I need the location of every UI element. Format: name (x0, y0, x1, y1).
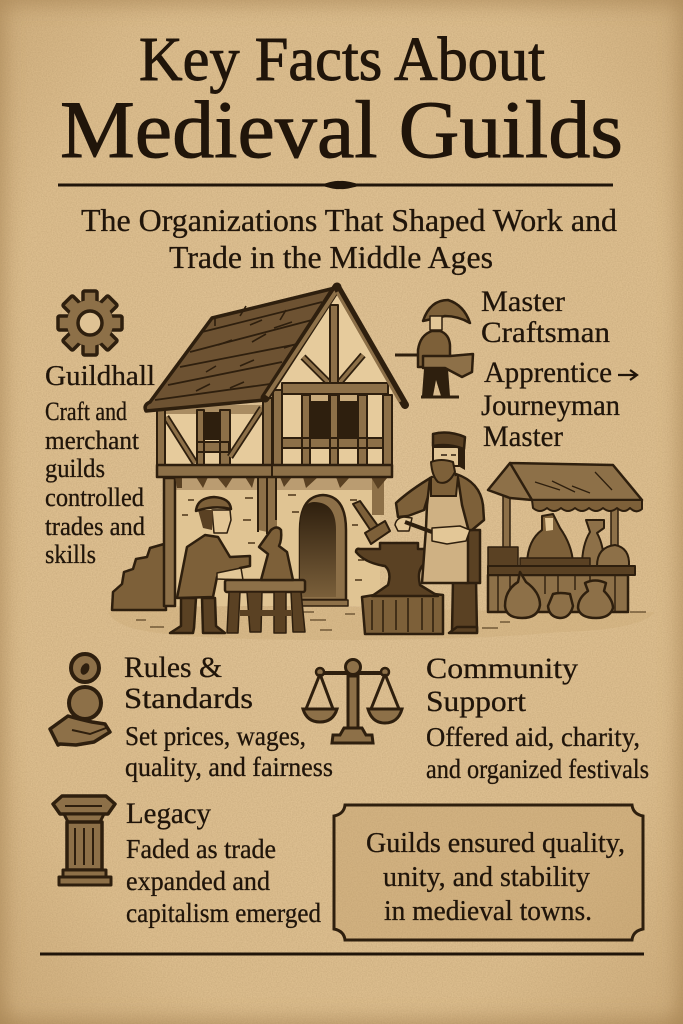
lower wall (170, 476, 380, 606)
callout (334, 805, 643, 940)
anvil (356, 543, 445, 596)
panel: master craftsman text (481, 285, 637, 453)
icon: stone column (53, 796, 115, 885)
subtitle: Trade in the Middle Ages (169, 239, 493, 275)
upper right bay (272, 390, 392, 466)
panel: guildhall text: Craft and (45, 397, 127, 426)
text: legacy: Faded as trade (126, 834, 276, 864)
text: community support: and organized festivals (426, 754, 649, 784)
panel: guildhall text: controlled (45, 483, 144, 512)
text: rules and standards (124, 651, 333, 782)
icon: master craftsman figure (395, 300, 473, 397)
panel: master craftsman text: Apprentice (484, 356, 612, 389)
text: community support (426, 652, 649, 784)
title: Medieval Guilds (60, 84, 623, 175)
text: legacy (126, 797, 321, 928)
panel: master craftsman text: Master (481, 285, 565, 318)
callout: unity, and stability (383, 861, 590, 893)
gable (265, 287, 407, 406)
text: legacy: Legacy (126, 797, 211, 830)
guildhall (145, 287, 407, 606)
panel: master craftsman text: Craftsman (481, 316, 610, 349)
hammer (353, 501, 378, 531)
text: community support: Support (426, 685, 527, 718)
counter (488, 575, 628, 612)
icon: gear (58, 291, 122, 355)
roof (145, 288, 335, 411)
text: rules and standards: Set prices, wages, (125, 721, 306, 751)
corbels (175, 477, 388, 489)
panel: guildhall text (45, 361, 155, 569)
panel: guildhall text: trades and (45, 512, 145, 541)
blacksmith (353, 433, 484, 633)
callout: Guilds ensured quality, (366, 827, 625, 859)
bench (225, 580, 305, 633)
illustration: medieval town scene (108, 287, 655, 640)
panel: guildhall text: guilds (45, 454, 105, 483)
ground (108, 606, 655, 640)
text: rules and standards: quality, and fairness (125, 752, 333, 782)
beam (157, 465, 392, 477)
panel: master craftsman text: Master (483, 420, 563, 453)
apprentice (170, 497, 250, 633)
goods (582, 520, 604, 566)
merchant (527, 514, 573, 563)
subtitle: The Organizations That Shaped Work and (81, 202, 617, 238)
market stall (488, 463, 642, 618)
icon: coin in hand (50, 654, 110, 745)
text: community support: Offered aid, charity, (426, 722, 640, 752)
panel: guildhall text: skills (45, 540, 96, 569)
panel: guildhall text: merchant (45, 426, 140, 455)
icon: balance scales (303, 660, 402, 743)
text: rules and standards: Standards (124, 682, 253, 715)
callout: in medieval towns. (384, 895, 592, 927)
stump (362, 593, 443, 634)
bush (112, 544, 166, 610)
text: legacy: capitalism emerged (126, 898, 321, 928)
text: community support: Community (426, 652, 578, 685)
text: legacy: expanded and (126, 866, 270, 896)
title (60, 26, 623, 175)
panel: master craftsman text: Journeyman (481, 389, 620, 422)
upper left bay (157, 405, 272, 467)
title: Key Facts About (139, 26, 545, 94)
door (300, 495, 346, 600)
subtitle (81, 202, 617, 275)
panel: guildhall text: Guildhall (45, 361, 155, 392)
bust on bench (259, 528, 293, 580)
sacks (505, 572, 540, 618)
text: rules and standards: Rules & (124, 651, 222, 684)
title divider (58, 181, 613, 189)
